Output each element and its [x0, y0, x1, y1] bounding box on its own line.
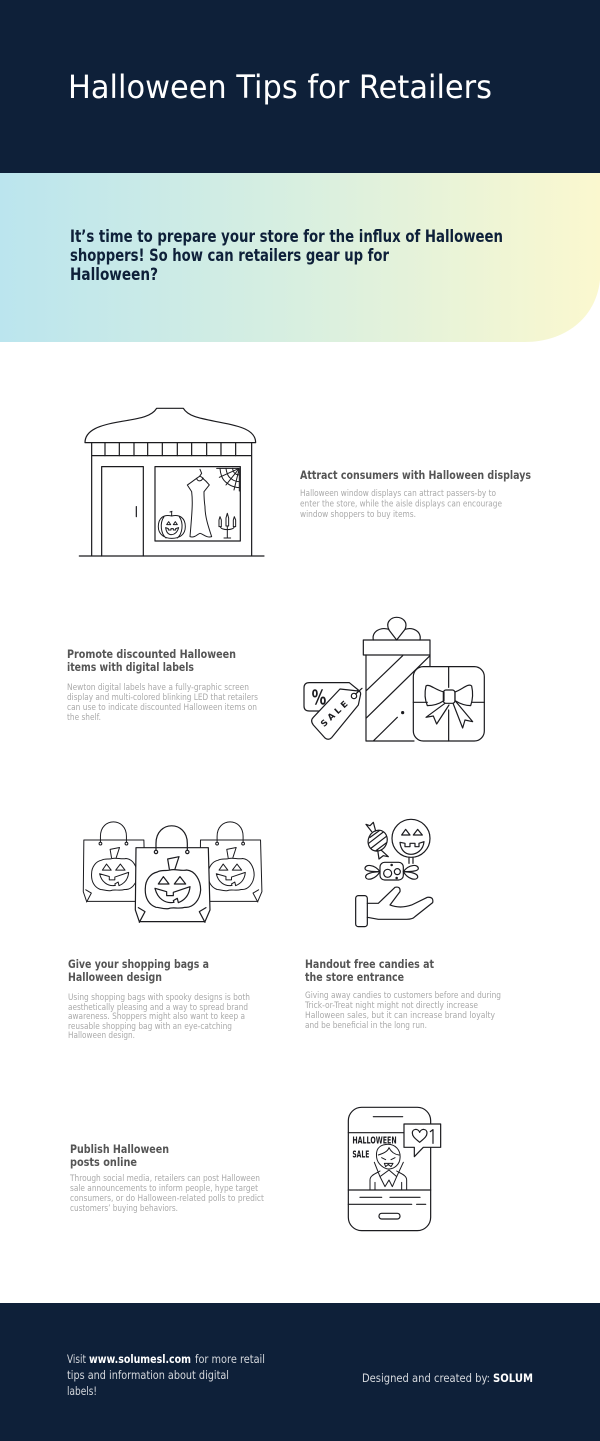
text: sale: SALE — [319, 699, 350, 730]
text: attract consumers: window shoppers to buy items. — [300, 510, 416, 520]
text: attract consumers: enter the store, while the aisle displays can encourage — [300, 500, 502, 510]
text: social posts: Through social media, retailers can post Halloween — [69, 1174, 260, 1184]
text: shopping bags: aesthetically pleasing and a way to spread brand — [68, 1003, 248, 1013]
text: shopping bags: Give your shopping bags a — [68, 957, 209, 971]
title: Halloween Tips for Retailers — [68, 68, 492, 106]
intro text: It’s time to prepare your store for the influx of Halloween — [70, 227, 503, 246]
footer: website note: for more retail — [195, 1352, 265, 1366]
icon: candies and hand — [356, 819, 433, 927]
icon: phone with halloween sale post — [348, 1107, 441, 1231]
text: digital labels: Newton digital labels have a fully-graphic screen — [67, 683, 249, 693]
text: digital labels: the shelf. — [67, 713, 101, 723]
text: free candies: Giving away candies to customers before and during — [305, 991, 501, 1001]
text: shopping bags: Using shopping bags with spooky designs is both — [68, 993, 250, 1003]
text: free candies: and be beneficial in the long run. — [305, 1021, 427, 1031]
text: free candies: Trick-or-Treat night might not directly increase — [304, 1001, 478, 1011]
title banner — [0, 0, 600, 173]
icon: storefront — [79, 408, 264, 556]
text: social posts: customers’ buying behaviors. — [70, 1204, 178, 1214]
text: shopping bags: Halloween design. — [68, 1031, 135, 1041]
intro text — [70, 227, 503, 284]
icon: shopping bags — [83, 822, 262, 922]
footer: credit: SOLUM — [493, 1371, 533, 1385]
text: shopping bags: Halloween design — [68, 970, 162, 984]
intro text: Halloween? — [70, 265, 158, 284]
intro text: shoppers! So how can retailers gear up for — [70, 246, 390, 265]
text: digital labels: can use to indicate discounted Halloween items on — [67, 703, 257, 713]
text: attract consumers: Attract consumers with Halloween displays — [300, 468, 531, 482]
text: free candies: Halloween sales, but it can increase brand loyalty — [305, 1011, 495, 1021]
icon: phone with halloween sale post: SALE — [352, 1149, 369, 1160]
footer: credit: Designed and created by: — [362, 1371, 490, 1385]
icon: gift boxes and sale tags — [304, 617, 484, 741]
text: halloween sale: HALLOWEEN — [352, 1135, 397, 1146]
text: digital labels: items with digital labels — [67, 660, 194, 674]
text: digital labels: display and multi-colored blinking LED that retailers — [67, 693, 258, 703]
text: free candies: the store entrance — [305, 970, 404, 984]
text: social posts: consumers, or do Halloween-related polls to predict — [70, 1194, 264, 1204]
footer — [0, 1303, 600, 1441]
text: shopping bags — [68, 957, 250, 1041]
text: social posts — [69, 1142, 264, 1214]
text: free candies: Handout free candies at — [305, 957, 434, 971]
footer: website note: Visit — [67, 1352, 86, 1366]
text: digital labels: Promote discounted Halloween — [67, 647, 236, 661]
text: digital labels — [67, 647, 258, 723]
text: attract consumers — [300, 468, 531, 520]
text: social posts: posts online — [70, 1155, 137, 1169]
text: attract consumers: Halloween window displays can attract passers-by to — [300, 489, 496, 499]
footer: website note: labels! — [67, 1384, 97, 1398]
footer: website note: tips and information about digital — [67, 1368, 229, 1382]
intro panel — [0, 173, 600, 342]
text: shopping bags: awareness. Shoppers might also want to keep a — [68, 1012, 245, 1022]
text: percent sign: % — [312, 686, 327, 710]
text: social posts: Publish Halloween — [70, 1142, 169, 1156]
footer: website note: www.solumesl.com — [89, 1352, 191, 1366]
text: shopping bags: reusable shopping bag with an eye-catching — [68, 1022, 232, 1032]
text: social posts: sale announcements to inform people, hype target — [70, 1184, 258, 1194]
text: free candies — [304, 957, 501, 1031]
footer: website note — [67, 1352, 265, 1398]
